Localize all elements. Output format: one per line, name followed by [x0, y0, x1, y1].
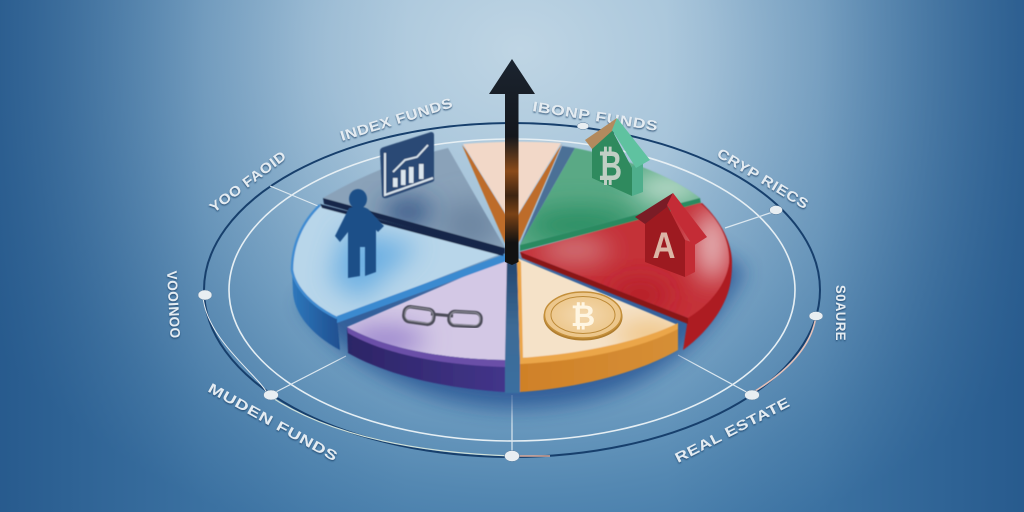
- slice: blue: [292, 204, 507, 350]
- label: left: VOOINOO: [164, 270, 184, 339]
- label: mutual funds: MUDEN FUNDS: [206, 380, 341, 464]
- outer ring: [203, 123, 820, 457]
- slice: slate: [323, 148, 505, 254]
- arrow: [489, 59, 535, 265]
- slice: peach: [462, 142, 562, 250]
- slice: orange: [517, 258, 684, 392]
- letter: A: [652, 225, 676, 266]
- slice: green: [520, 148, 704, 251]
- centre gap: [505, 262, 520, 393]
- slice: purple: [345, 258, 507, 392]
- label: index funds: INDEX FUNDS: [338, 94, 455, 144]
- connector lines: [270, 186, 776, 456]
- gap wedge: [520, 146, 575, 245]
- label: right: S0AURE: [833, 285, 849, 341]
- label: bond funds: IBONP FUNDS: [532, 98, 659, 134]
- icon: red house: [635, 193, 707, 277]
- icon: green house: [585, 118, 650, 196]
- bitcoin glyph: ₿: [598, 142, 622, 189]
- icon: chain: [403, 306, 481, 327]
- label: real estate: REAL ESTATE: [672, 394, 793, 466]
- inner ring: [229, 139, 795, 441]
- icon: person: [335, 189, 384, 278]
- ring nodes: [198, 122, 823, 462]
- label: left top: YOO FAOID: [206, 147, 289, 215]
- pie chart: [292, 142, 732, 393]
- icon: chart sign: [380, 132, 434, 198]
- slice: red: [520, 203, 732, 350]
- pie shadow: [300, 240, 745, 408]
- icon: coin: [544, 292, 622, 340]
- bitcoin glyph: ₿: [571, 300, 595, 333]
- ring labels: [164, 94, 849, 466]
- label: crypto: CRYP RIECS: [714, 145, 812, 212]
